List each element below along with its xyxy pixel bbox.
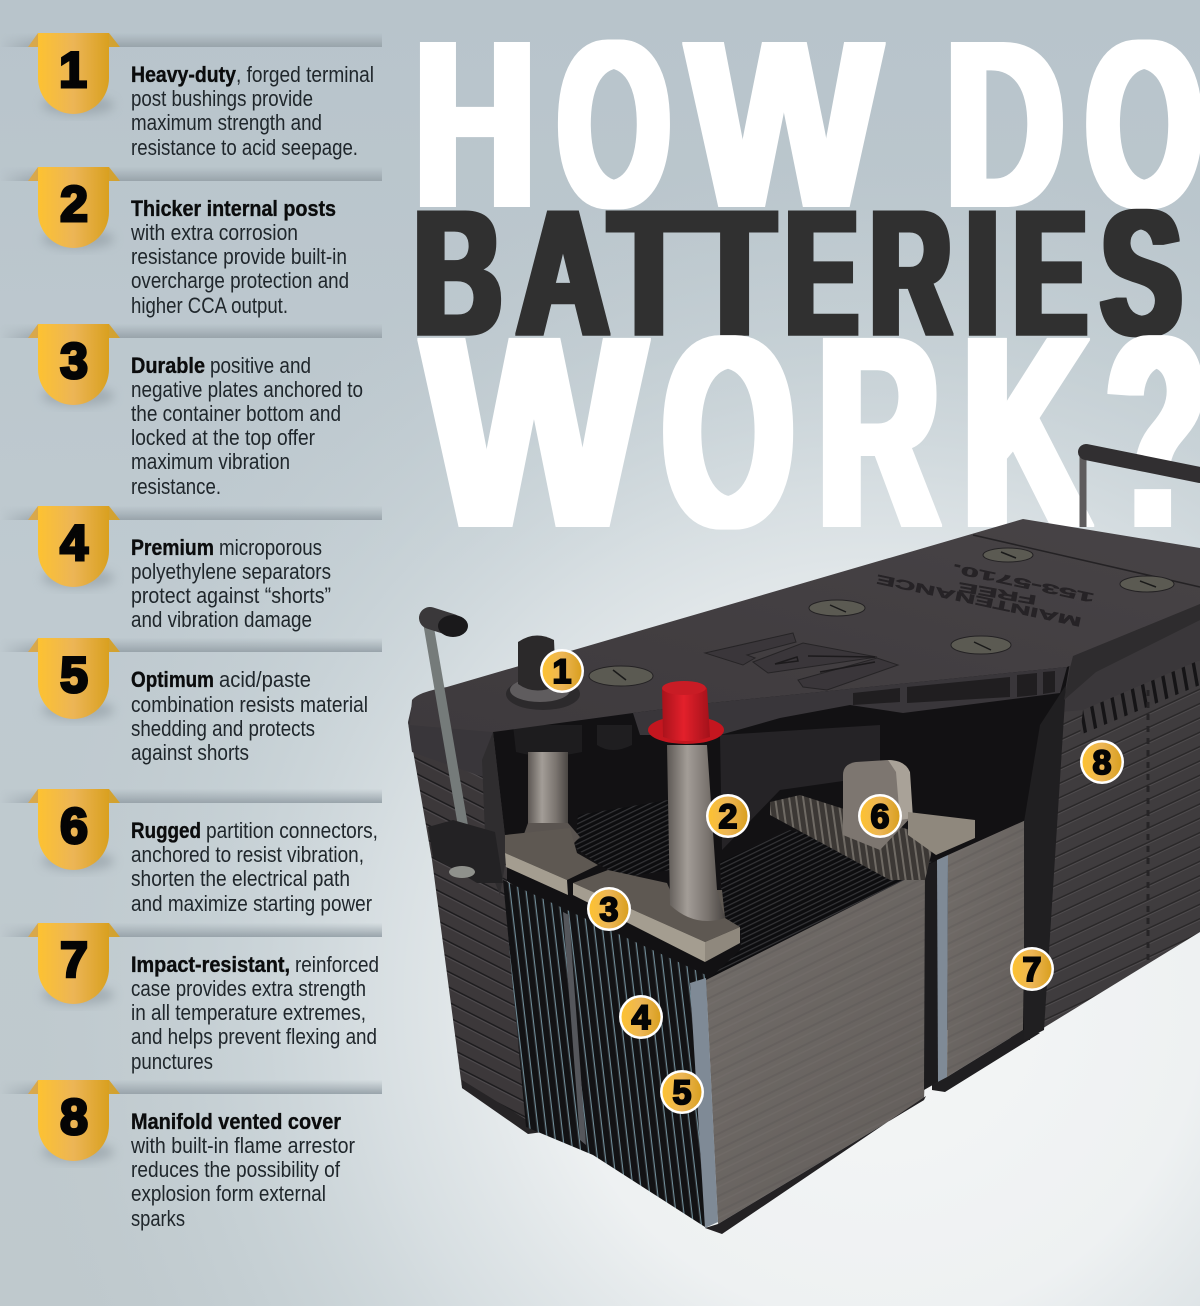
- text 3: [131, 353, 363, 499]
- title line: WORK?: W: [424, 280, 646, 584]
- text 3: the container bottom and: [131, 401, 341, 426]
- lid logo: [705, 633, 898, 690]
- callout 4: [619, 995, 663, 1039]
- text 8: [130, 1109, 355, 1231]
- post 2 strap: [573, 870, 740, 962]
- text 5: acid/paste: [219, 667, 311, 692]
- title line: BATTERIES: E: [1014, 173, 1087, 373]
- text 7: case provides extra strength: [131, 976, 366, 1001]
- text 5: combination resists material: [131, 692, 368, 717]
- title line: WORK?: R: [819, 280, 939, 584]
- plate floor behind strap: [575, 800, 670, 878]
- vent cap 2: [983, 548, 1033, 562]
- feature 7: [0, 923, 382, 1074]
- ribbon band 8: [0, 1080, 382, 1162]
- text 4: [131, 535, 331, 632]
- feature 1: [0, 33, 382, 160]
- title line: BATTERIES: R: [870, 173, 951, 373]
- title line: BATTERIES: T: [609, 173, 689, 373]
- second plate panel: [924, 820, 1040, 1092]
- text 4: microporous: [219, 535, 322, 560]
- text 1: Heavy-duty: [131, 62, 236, 87]
- number 5: 5: [60, 647, 88, 703]
- number 3: 3: [60, 333, 88, 389]
- ribbon band 1: [0, 33, 382, 115]
- text 8: with built-in flame arrestor: [130, 1133, 355, 1158]
- title line: BATTERIES: A: [517, 173, 609, 373]
- text 6: anchored to resist vibration,: [131, 842, 364, 867]
- battery cutaway illustration: [408, 452, 1200, 1234]
- feature 3: [0, 324, 382, 499]
- text 4: and vibration damage: [131, 607, 312, 632]
- text 4: protect against “shorts”: [131, 583, 331, 608]
- lid lettering: [874, 561, 1096, 630]
- partition wall edge: [1024, 685, 1066, 1040]
- callout 7: 7: [1023, 951, 1041, 989]
- text 1: , forged terminal: [236, 62, 374, 87]
- ribbon band 4: [0, 506, 382, 588]
- callout 3: [587, 887, 631, 931]
- text 7: reinforced: [295, 952, 379, 977]
- left strap: [505, 828, 598, 895]
- text 6: shorten the electrical path: [131, 866, 350, 891]
- left lifting handle: [428, 615, 503, 883]
- text 7: and helps prevent flexing and: [131, 1024, 377, 1049]
- text 1: post bushings provide: [131, 86, 313, 111]
- callout 6: 6: [871, 798, 889, 836]
- title line: BATTERIES: E: [786, 173, 858, 373]
- text 6: partition connectors,: [206, 818, 378, 843]
- number 7: 7: [60, 932, 88, 988]
- text 8: sparks: [131, 1206, 185, 1231]
- connector comb: [770, 795, 935, 880]
- callout 4: 4: [632, 999, 651, 1037]
- separator fins: [503, 880, 706, 1227]
- ribbon band 2: [0, 167, 382, 249]
- front plate panel: [690, 866, 932, 1234]
- vent cap 4: [809, 600, 865, 616]
- text 6: [131, 818, 378, 916]
- ribbon band 7: [0, 923, 382, 1005]
- partition connector: [843, 760, 913, 850]
- text 5: [131, 667, 368, 765]
- ribbon band 6: [0, 789, 382, 871]
- text 2: with extra corrosion: [130, 220, 298, 245]
- text 5: Optimum: [131, 667, 214, 692]
- lid surface: [410, 519, 1200, 732]
- callout 1: 1: [553, 653, 571, 691]
- text 7: in all temperature extremes,: [131, 1000, 366, 1025]
- text 7: punctures: [131, 1049, 213, 1074]
- feature 4: [0, 506, 382, 632]
- title: how do batteries work: [417, 40, 1200, 530]
- text 3: maximum vibration: [131, 449, 290, 474]
- lid front edge and hollow section: [633, 604, 1200, 735]
- text 7: [131, 952, 379, 1074]
- number 1: 1: [59, 42, 87, 98]
- title line: BATTERIES: B: [414, 173, 502, 373]
- plate tops: [706, 830, 932, 982]
- vent cap 3: [1120, 576, 1174, 592]
- callout 5: 5: [673, 1074, 691, 1112]
- text 6: and maximize starting power: [131, 891, 372, 916]
- interior back wall: [490, 662, 1070, 1040]
- text 8: explosion form external: [131, 1181, 326, 1206]
- text 3: locked at the top offer: [131, 425, 315, 450]
- number 4: 4: [60, 515, 88, 571]
- text 6: Rugged: [131, 818, 201, 843]
- left ribbed side wall: [408, 700, 550, 1134]
- callout 5: [660, 1070, 704, 1114]
- callout 2: [706, 794, 750, 838]
- title line: BATTERIES: T: [694, 173, 775, 373]
- text 8: Manifold vented cover: [131, 1109, 341, 1134]
- right strap: [908, 812, 975, 855]
- callout 1: [540, 649, 584, 693]
- text 7: Impact-resistant,: [131, 952, 290, 977]
- number 6: 6: [60, 798, 88, 854]
- text 2: [130, 196, 349, 318]
- ribbon band 3: [0, 324, 382, 406]
- lid text: free: FREE: [956, 579, 1038, 608]
- terminal post 1: [506, 635, 580, 710]
- right carrying handle: [1083, 452, 1200, 527]
- right ribbed side wall: [1040, 612, 1200, 1030]
- text 4: Premium: [131, 535, 214, 560]
- feature 8: [0, 1080, 382, 1231]
- text 3: resistance.: [131, 474, 221, 499]
- text 5: shedding and protects: [131, 716, 315, 741]
- text 2: Thicker internal posts: [131, 196, 336, 221]
- feature 5: [0, 638, 382, 765]
- text 2: overcharge protection and: [131, 268, 349, 293]
- callout 3: 3: [600, 891, 618, 929]
- callout 7: [1010, 947, 1054, 991]
- callout 8: 8: [1093, 744, 1111, 782]
- callout 2: 2: [719, 798, 737, 836]
- lid text: part number: 153-5710.: [951, 561, 1096, 606]
- text 8: reduces the possibility of: [131, 1157, 341, 1182]
- title line: WORK?: K: [963, 280, 1089, 584]
- text 1: [131, 62, 374, 160]
- feature 2: [0, 167, 382, 318]
- red terminal cap: [648, 681, 724, 744]
- vent cap 5: [951, 636, 1011, 654]
- number 8: 8: [60, 1089, 88, 1145]
- post 1 underside bushing and shaft: [513, 725, 632, 845]
- text 1: maximum strength and: [131, 110, 322, 135]
- callout 8: [1080, 740, 1124, 784]
- post 2 shaft: [667, 745, 725, 921]
- ribbon band 5: [0, 638, 382, 720]
- text 2: resistance provide built-in: [131, 244, 347, 269]
- title line: WORK?: O: [663, 280, 793, 584]
- text 3: negative plates anchored to: [131, 377, 363, 402]
- vent cap 1: [589, 666, 653, 686]
- text 3: Durable: [131, 353, 205, 378]
- vent caps: [589, 548, 1174, 686]
- text 3: positive and: [210, 353, 311, 378]
- text 4: polyethylene separators: [131, 559, 331, 584]
- lid text: maintenance: MAINTENANCE: [874, 571, 1083, 630]
- callout 6: [858, 794, 902, 838]
- number 2: 2: [60, 176, 88, 232]
- rear inner panel: [720, 725, 880, 850]
- text 5: against shorts: [131, 740, 249, 765]
- feature 6: [0, 789, 382, 916]
- title line: BATTERIES: I: [966, 173, 999, 373]
- text 1: resistance to acid seepage.: [131, 135, 358, 160]
- text 2: higher CCA output.: [131, 293, 288, 318]
